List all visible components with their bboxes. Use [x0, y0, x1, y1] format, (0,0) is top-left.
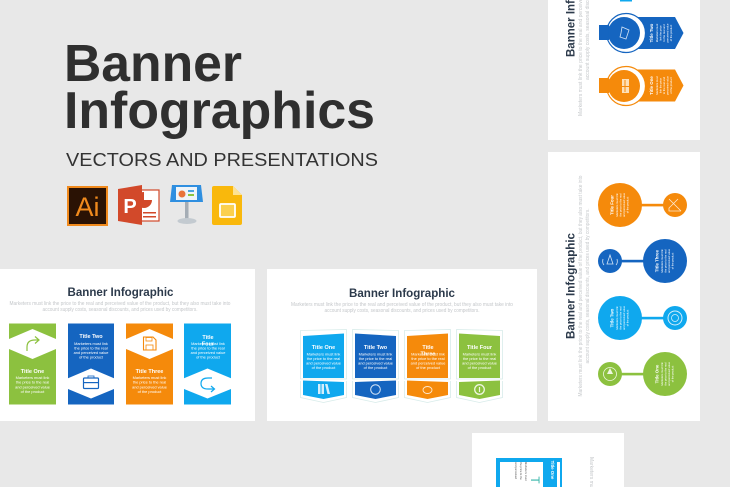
card: title three: of the product — [416, 365, 441, 370]
card: title four: and perceived value — [462, 361, 497, 366]
column: title one: and perceived value — [15, 384, 50, 389]
tag: title two: link the price — [658, 25, 662, 41]
card: title three: the price to the real — [411, 356, 445, 361]
column: title one: Title One — [21, 369, 44, 375]
circle: title two: and perceived value — [622, 305, 626, 330]
column: title two — [68, 324, 114, 404]
column: title two: the price to the real — [74, 346, 108, 351]
description: Marketers must link the price to the real and perceived value of the product, but they also must take into — [291, 302, 513, 308]
column: title four — [184, 324, 231, 404]
card: title four: of the product — [468, 365, 492, 370]
circle: title two: the price to the real — [618, 306, 622, 330]
description: account supply costs, seasonal discounts, and prices used by competitors. — [585, 208, 591, 364]
column: title three: Marketers must link — [133, 375, 166, 380]
heading: Banner Infographic — [349, 288, 456, 300]
icon: PowerPoint — [118, 185, 159, 225]
title: Infographics — [64, 82, 375, 140]
card: title one: of the product — [312, 365, 336, 370]
column: title one: Marketers must link — [16, 375, 49, 380]
column: title two: Title Two — [79, 334, 103, 340]
tag: title two: Title Two — [649, 23, 654, 42]
column: title three: of the product — [138, 389, 162, 394]
circle: title four: Marketers must link — [615, 193, 619, 217]
column: title four: the price to the real — [191, 346, 225, 351]
icon: Google Slides — [212, 186, 242, 225]
column: title four: and perceived value — [191, 350, 225, 355]
blue card — [496, 458, 562, 487]
circle: title two: of the product — [626, 310, 630, 326]
card: title two — [352, 330, 398, 402]
tag: title one: perceived value — [666, 76, 670, 95]
circle: title two — [598, 296, 687, 340]
tag: title two — [599, 14, 684, 52]
circle: title four: Title Four — [610, 195, 614, 215]
card: title one: the price to the real — [307, 356, 340, 361]
tag: title one: Marketers must — [655, 76, 659, 95]
column: title two: of the product — [79, 354, 104, 359]
column: title three: the price to the real — [133, 380, 166, 385]
panel: cropped slide — [472, 433, 624, 487]
column: title two: Marketers must link — [74, 341, 108, 346]
icon: PowerPoint: P — [123, 196, 137, 218]
tag: title one: of the product — [669, 77, 673, 94]
tag: title one: Title One — [649, 76, 654, 95]
tag: title two: to the real and — [662, 24, 666, 42]
card: title one: Title One — [312, 345, 335, 351]
column: title one: the price to the real — [16, 380, 49, 385]
card: title two: Title Two — [364, 345, 388, 351]
circle: title two: Title Two — [610, 308, 614, 327]
column: title four: Four — [202, 342, 215, 348]
description — [578, 175, 591, 396]
circle: title four: of the product — [626, 197, 630, 213]
description: account supply costs, seasonal discounts, and prices used by competitors. — [42, 307, 198, 313]
circle: title three: Title Three — [654, 249, 660, 272]
card: title one — [300, 330, 346, 402]
column: title four: Title — [202, 335, 214, 341]
tag: title two: perceived value — [666, 23, 670, 42]
column: title four: Marketers must link — [191, 341, 225, 346]
column: title one: of the product — [21, 389, 45, 394]
description — [291, 302, 513, 314]
card: title four — [456, 330, 502, 402]
card: title two: of the product — [364, 365, 388, 370]
subtitle: VECTORS AND PRESENTATIONS — [66, 150, 378, 170]
card: title one: and perceived value — [306, 361, 341, 366]
card: title one: Marketers must link — [307, 351, 340, 356]
description: account supply costs, seasonal discounts, and prices used by competitors. — [324, 308, 480, 314]
card: title four: Title Four — [467, 345, 493, 351]
card: title three: Marketers must link — [411, 351, 445, 356]
description — [578, 0, 591, 116]
card: title two: and perceived value — [358, 361, 393, 366]
column: title one — [9, 324, 56, 404]
tag: title one: to the real and — [662, 76, 666, 94]
card: title four: Marketers must link — [463, 351, 496, 356]
circle: title one: Marketers must link — [660, 362, 664, 386]
circle: title one: and perceived value — [667, 361, 671, 386]
card: title two: Marketers must link — [359, 351, 392, 356]
circle: title one — [598, 352, 687, 396]
icon: Keynote — [170, 185, 203, 224]
description: Marketers must link the price to the real and perceived value of the product, but they also must take into — [578, 175, 584, 396]
circle: title one: Title One — [654, 364, 660, 383]
title — [64, 35, 375, 140]
card: title three: Three — [421, 352, 435, 358]
column: title three — [126, 324, 173, 404]
column: title three: and perceived value — [132, 384, 167, 389]
top circle fragment — [620, 0, 632, 2]
icon: Adobe Illustrator: Ai — [75, 192, 100, 222]
column: title two: and perceived value — [74, 350, 108, 355]
card: title three: Title — [422, 345, 434, 351]
column: title three: Title Three — [136, 369, 163, 375]
panel: hexagon tags — [548, 0, 700, 140]
description — [10, 301, 231, 313]
circle: title three: of the product — [670, 253, 674, 269]
icon: Adobe Illustrator — [68, 187, 107, 225]
tag: title one: link the price — [658, 77, 662, 93]
circle: title four: and perceived value — [622, 192, 626, 217]
blue card: Marketers must — [524, 462, 528, 481]
heading: Banner Infographic — [566, 232, 578, 339]
tag: title two: Marketers must — [655, 23, 659, 42]
circle: title four — [598, 183, 687, 227]
circle: title one: the price to the real — [664, 362, 668, 386]
card: title three — [404, 330, 450, 402]
circle: title four: the price to the real — [618, 193, 622, 217]
circle: title one: of the product — [670, 366, 674, 382]
blue card: Title One — [550, 461, 555, 480]
blue card: the price to the — [519, 462, 523, 480]
panel: ribbon columns — [0, 269, 255, 421]
circle: title two: Marketers must link — [615, 306, 619, 330]
blue card: T — [528, 476, 542, 484]
tag: title one — [599, 66, 684, 106]
panel: bookmark cards — [267, 269, 537, 421]
card: title two: the price to the real — [359, 356, 392, 361]
column: title four: of the product — [196, 354, 221, 359]
heading: Banner Infographic — [68, 287, 174, 299]
tag: title two: of the product — [669, 25, 673, 41]
panel: circles — [548, 152, 700, 421]
title: Banner — [64, 35, 242, 93]
card: title three: and perceived value — [411, 361, 445, 366]
blue card: and perceived — [514, 462, 518, 479]
circle: title three: Marketers must link — [660, 249, 664, 273]
circle: title three: and perceived value — [667, 248, 671, 273]
circle: title three — [598, 239, 687, 283]
card: title four: the price to the real — [463, 356, 496, 361]
description: Marketers must link the price to the real and perceived value of the product, but they also must take into — [10, 301, 231, 307]
circle: title three: the price to the real — [664, 249, 668, 273]
